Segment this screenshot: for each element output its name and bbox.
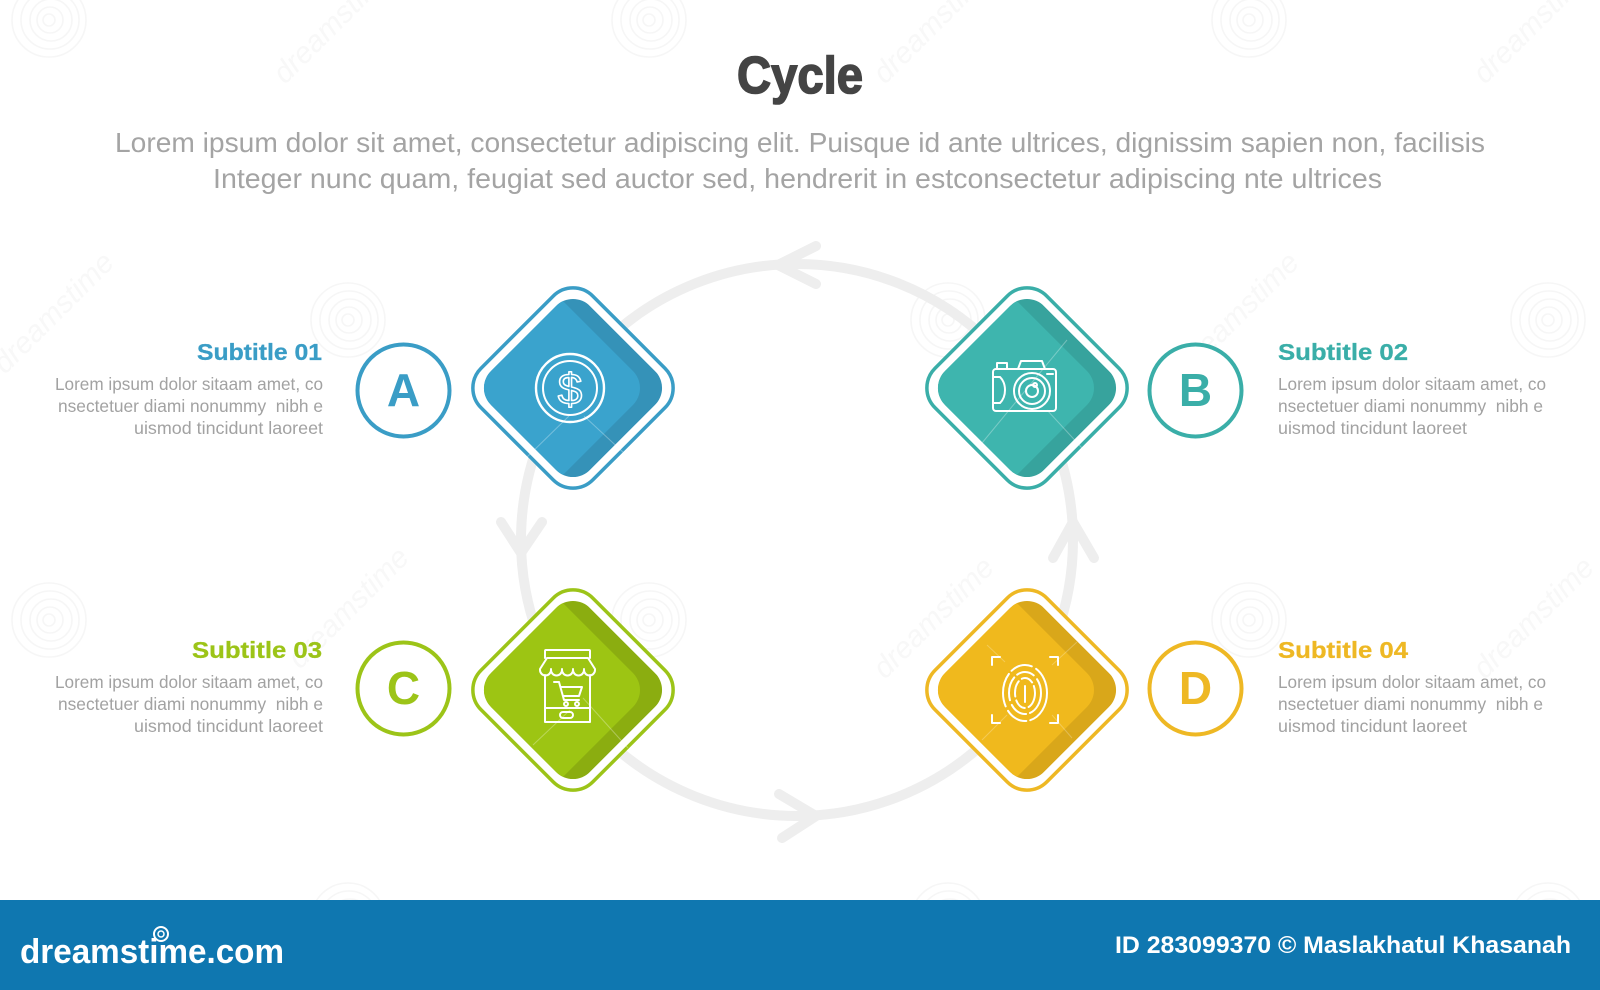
icon: mobile shop [540,650,595,722]
text block: subtitle 01: Lorem ipsum dolor sitaam amet, co [55,374,323,394]
letter badge B: B [1179,364,1212,416]
text block: subtitle 02: Lorem ipsum dolor sitaam amet, co [1278,374,1546,394]
letter badge A: A [387,364,420,416]
text block: subtitle 03: Subtitle 03 [192,637,322,663]
text block: subtitle 04: Lorem ipsum dolor sitaam amet, co [1278,672,1546,692]
text block: subtitle 02: Subtitle 02 [1278,339,1408,365]
text block: subtitle 04: Subtitle 04 [1278,637,1408,663]
arrow: left, pointing down [501,522,542,553]
diamond A: dollar icon [471,286,675,490]
text: dreamstime [867,551,1001,685]
credit text: ID 283099370 © Maslakhatul Khasanah [1115,932,1571,959]
text block: subtitle 01: nsectetuer diami nonummy nibh e [58,396,323,416]
text block: subtitle 04: uismod tincidunt laoreet [1278,716,1467,736]
letter badge D: D [1179,662,1212,714]
text block: subtitle 03: nsectetuer diami nonummy nibh e [58,694,323,714]
arrow: top, pointing left [778,246,816,284]
diamond C: mobile shop icon [471,588,675,792]
letter badge D [1150,642,1242,734]
text block: subtitle 04: nsectetuer diami nonummy nibh e [1278,694,1543,714]
text block: subtitle 02 [1278,339,1546,438]
diamond D: fingerprint icon [925,588,1129,792]
diamond B: camera icon [925,286,1129,490]
text: dreamstime [1467,551,1600,685]
letter badge C [358,642,450,734]
arrow: bottom, pointing right [779,794,816,838]
footer bar [0,900,1600,990]
cycle ring with arrows [501,246,1094,838]
intro text [115,127,1485,194]
text block: subtitle 01: uismod tincidunt laoreet [134,418,323,438]
text block: subtitle 02: uismod tincidunt laoreet [1278,418,1467,438]
intro text: Integer nunc quam, feugiat sed auctor sed, hendrerit in estconsectetur adipiscing nte ultrices [213,163,1382,194]
text block: subtitle 04 [1278,637,1546,736]
text block: subtitle 01 [55,339,323,438]
icon: camera [993,361,1056,411]
text: dreamstime [1172,246,1306,380]
icon: dollar coin: $ [558,365,582,414]
letter badge B [1150,344,1242,436]
arrow: right, pointing up [1053,522,1094,558]
letter badge C: C [387,662,420,714]
text block: subtitle 02: nsectetuer diami nonummy nibh e [1278,396,1543,416]
text block: subtitle 03: uismod tincidunt laoreet [134,716,323,736]
letter badge A [358,344,450,436]
title: Cycle [737,47,863,105]
intro text: Lorem ipsum dolor sit amet, consectetur adipiscing elit. Puisque id ante ultrices, dignissim sapien non, facilisis [115,127,1485,158]
logo: dreamstime: dreamstime.com [20,933,284,971]
text block: subtitle 03: Lorem ipsum dolor sitaam amet, co [55,672,323,692]
icon: fingerprint scan [992,657,1058,723]
text: dreamstime [282,541,416,675]
text block: subtitle 01: Subtitle 01 [197,339,322,365]
text block: subtitle 03 [55,637,323,736]
icon: dollar coin [536,354,604,422]
